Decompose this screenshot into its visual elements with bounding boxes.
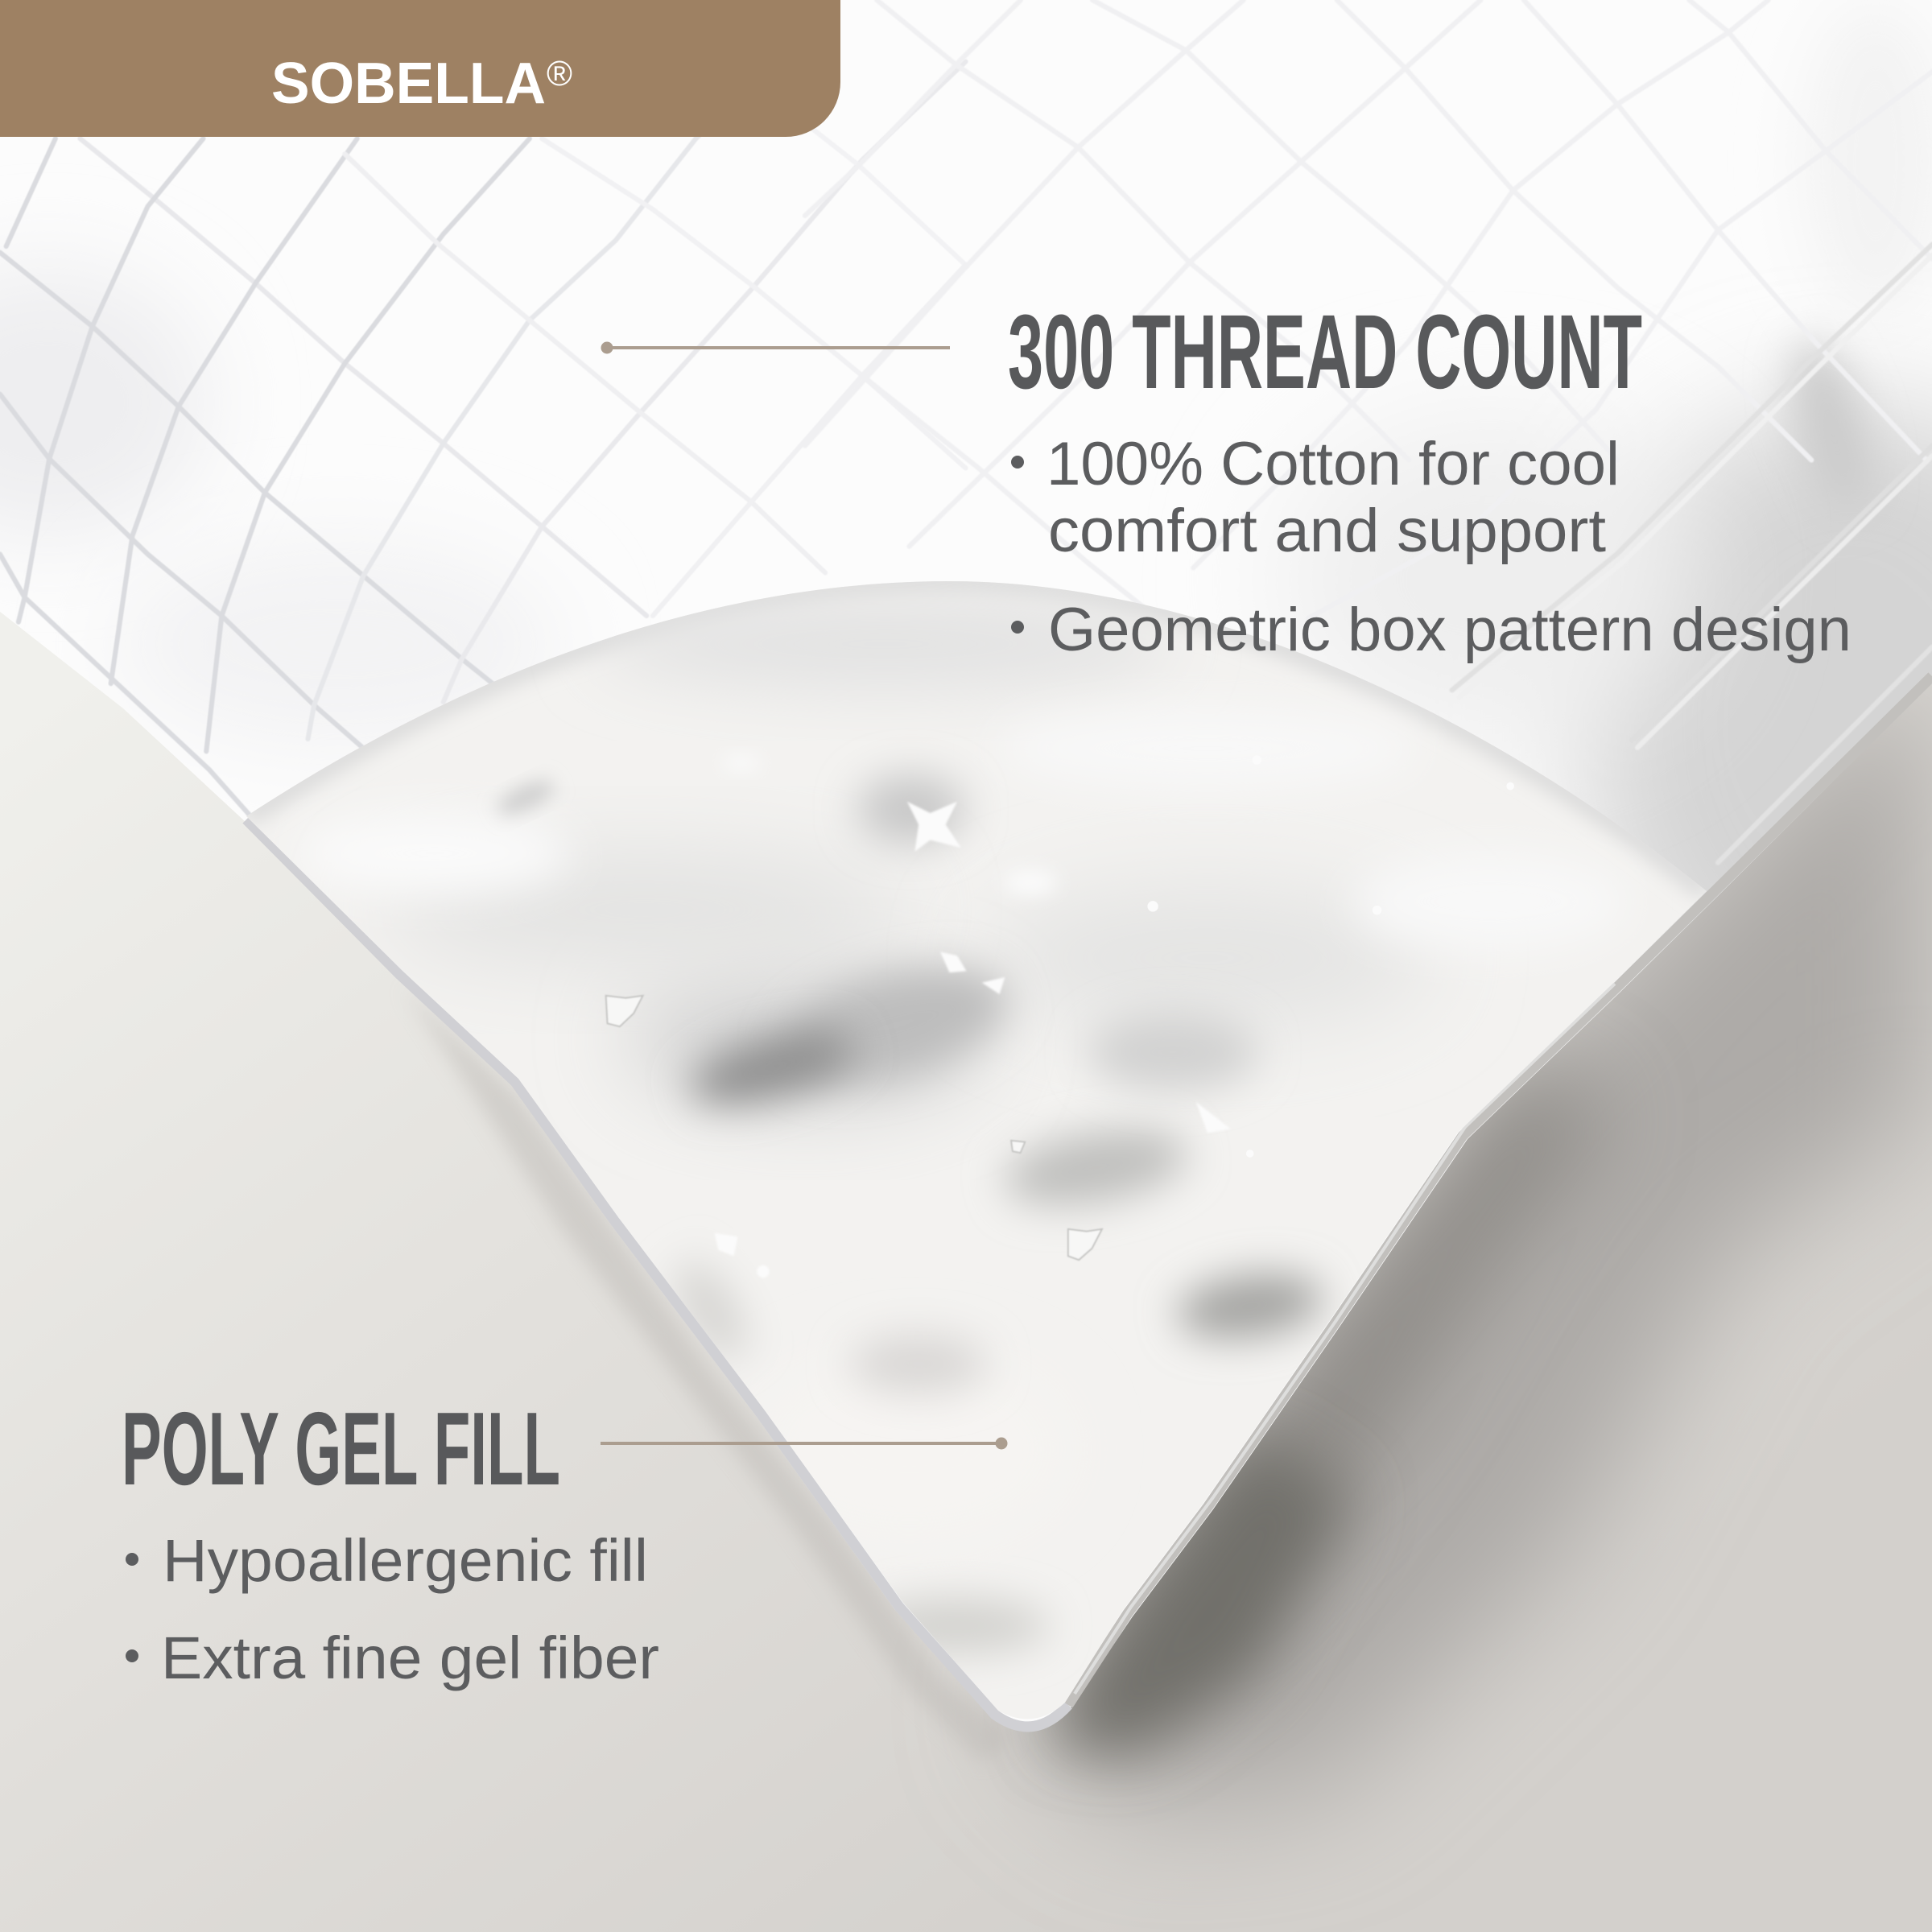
pillow cast shadow (402, 644, 1932, 1811)
bullet: hypoallergenic: Hypoallergenic fill (163, 1527, 648, 1594)
pillow box-pattern grid (0, 0, 1932, 863)
grid: right side lines (805, 0, 1932, 863)
bullet: cotton: 100% Cotton for cool (1046, 430, 1620, 498)
callout: 300 thread count (1008, 292, 1852, 664)
leader line: poly gel fill (601, 1438, 1008, 1449)
leader line: thread count (601, 341, 950, 354)
fill dark folds (493, 774, 1327, 1653)
feather flecks (715, 755, 1514, 1278)
grid: left side lines (0, 37, 967, 825)
registered mark: ® (547, 54, 572, 93)
callout: poly gel fill (122, 1391, 659, 1691)
cut-away showing poly gel fill (246, 581, 1707, 1719)
bullet: gel fiber: Extra fine gel fiber (161, 1624, 659, 1691)
heading: poly gel fill: POLY GEL FILL (122, 1391, 560, 1507)
brand name: SOBELLA (271, 52, 546, 116)
bullet: geometric pattern: Geometric box pattern design (1048, 596, 1852, 664)
bullet: cotton: comfort and support (1048, 497, 1606, 565)
pillow piping seam (246, 676, 1932, 1727)
bullet: cotton (1011, 430, 1620, 565)
fill top shading (246, 581, 1707, 1137)
brand banner (0, 0, 840, 137)
feather tufts with outline (606, 996, 1102, 1260)
